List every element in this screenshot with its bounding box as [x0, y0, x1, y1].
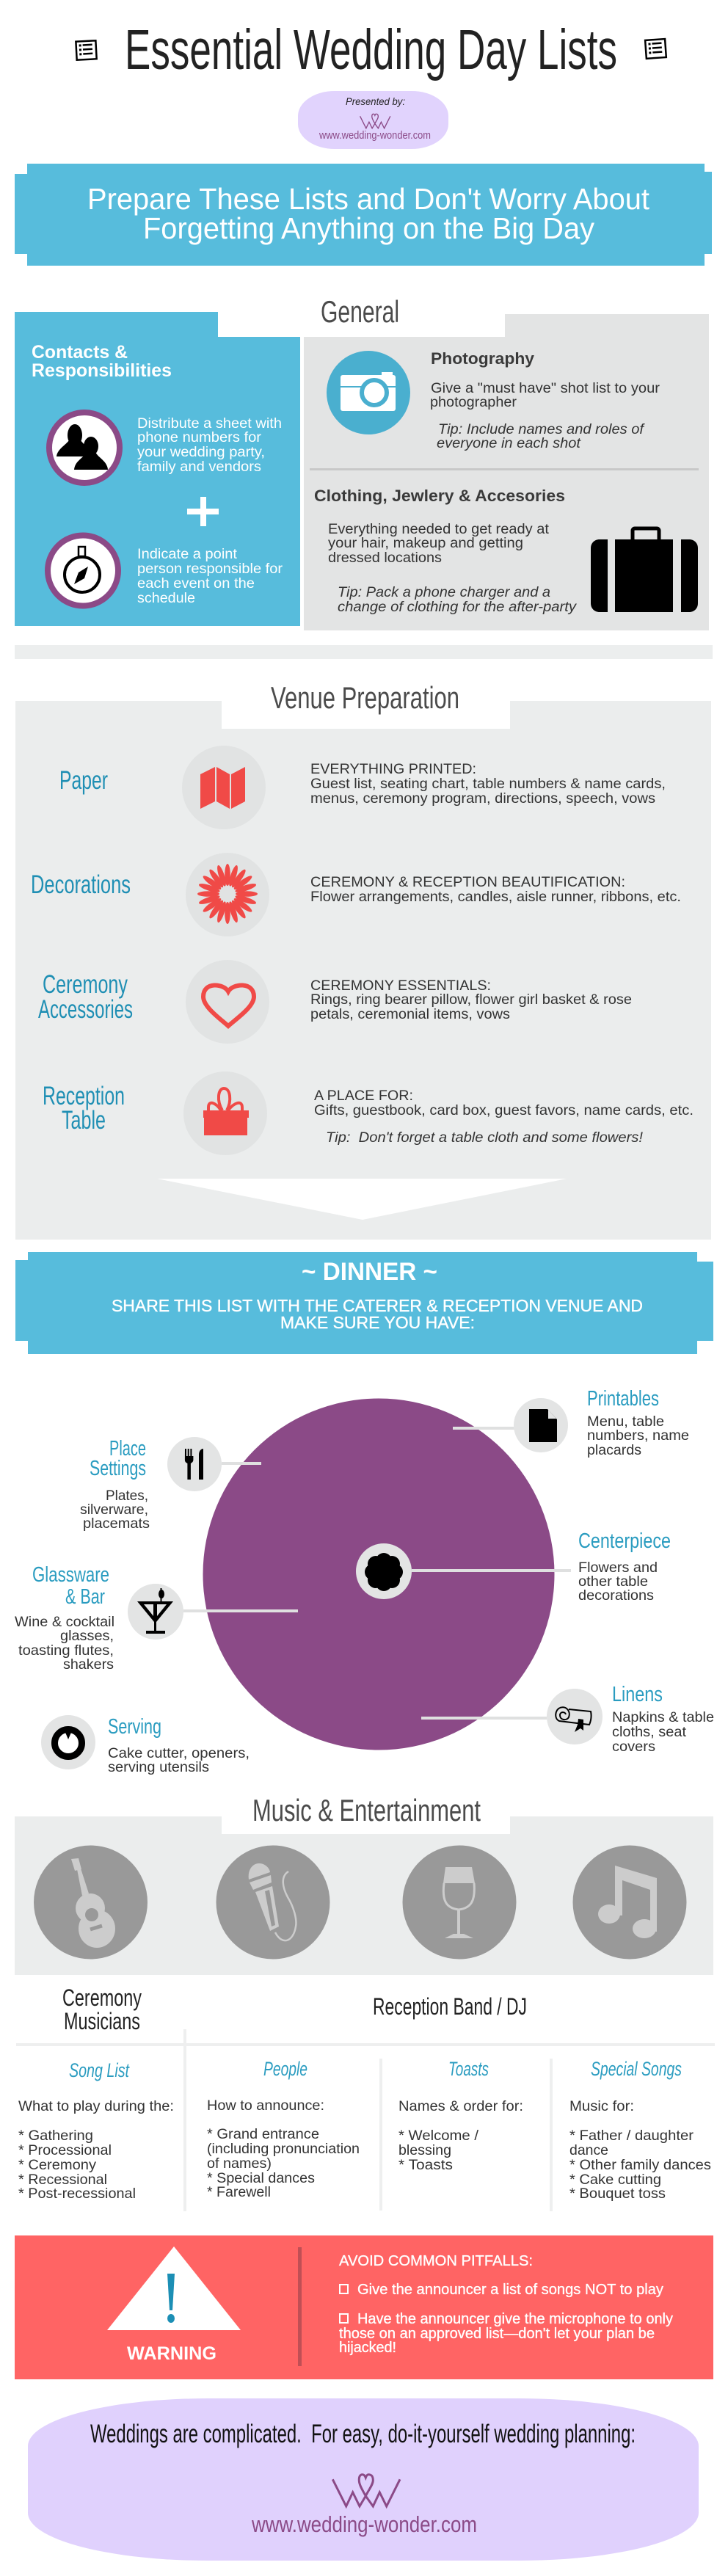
item: centerpiece text	[578, 1529, 671, 1604]
banner: intro: Forgetting Anything on the Big Day	[143, 211, 594, 245]
item: linens	[547, 1683, 714, 1755]
row: ceremony accessories: CEREMONY ESSENTIALS:	[310, 978, 491, 994]
item: place settings: Place	[109, 1437, 146, 1460]
column: people: * Grand entrance	[207, 2126, 319, 2142]
column: special songs: * Other family dances	[569, 2157, 711, 2173]
text: distribute: phone numbers for	[137, 429, 262, 445]
arrow: down	[157, 1179, 567, 1220]
item: linens: Napkins & table	[612, 1709, 714, 1725]
text: indicate: each event on the	[137, 575, 255, 592]
text: photography: Photography	[431, 349, 534, 368]
heading: reception band: Reception Band / DJ	[373, 1993, 527, 2020]
text: pitfalls	[339, 2253, 673, 2356]
text: pitfalls: Give the announcer a list of songs NOT to play	[357, 2282, 663, 2298]
column: people: * Farewell	[207, 2184, 271, 2200]
item: linens: covers	[612, 1739, 655, 1755]
item: glassware and bar: toasting flutes,	[18, 1642, 114, 1659]
text: clothing: change of clothing for the after-party	[338, 599, 577, 615]
icon: microphone	[216, 1845, 330, 1960]
text: photography: Tip: Include names and roles of	[438, 421, 646, 437]
panel: contacts and responsibilities: Contacts &	[32, 342, 128, 363]
panel: venue preparation	[15, 680, 711, 1240]
column: toasts: blessing	[398, 2142, 451, 2158]
text: distribute: your wedding party,	[137, 444, 265, 460]
text: pitfalls: hijacked!	[339, 2340, 396, 2356]
item: serving: Cake cutter, openers,	[108, 1745, 250, 1761]
banner: dinner: SHARE THIS LIST WITH THE CATERER & RECEPTION VENUE AND	[112, 1296, 643, 1315]
text: photography: everyone in each shot	[437, 435, 582, 451]
column: song list: Song List	[69, 2059, 130, 2081]
column: song list: * Gathering	[18, 2128, 93, 2144]
row: ceremony accessories	[38, 960, 632, 1044]
icon: plus	[187, 497, 219, 526]
row: reception table: A PLACE FOR:	[314, 1088, 413, 1104]
icon: guitar	[34, 1845, 148, 1960]
column: people: * Special dances	[207, 2170, 315, 2186]
column: special songs: * Cake cutting	[569, 2172, 661, 2188]
row: ceremony accessories: Ceremony	[43, 970, 128, 999]
row: paper: Guest list, seating chart, table numbers & name cards,	[310, 776, 666, 792]
item: place settings	[80, 1437, 222, 1532]
item: printables: placards	[587, 1442, 641, 1458]
item: glassware and bar: & Bar	[65, 1585, 105, 1609]
column: special songs: Special Songs	[591, 2058, 682, 2080]
column: special songs: Music for:	[569, 2098, 634, 2114]
column: song list: * Processional	[18, 2142, 112, 2158]
panel: music and entertainment	[15, 1793, 713, 1975]
column: toasts: * Welcome /	[398, 2128, 479, 2144]
icon: suitcase	[591, 528, 698, 612]
item: centerpiece text: Centerpiece	[578, 1529, 671, 1553]
panel: contacts and responsibilities	[15, 312, 300, 626]
item: glassware and bar: Wine & cocktail	[15, 1614, 114, 1630]
row: reception table: Gifts, guestbook, card box, guest favors, name cards, etc.	[314, 1102, 694, 1118]
text: clothing: Everything needed to get ready at	[328, 521, 550, 537]
row: ceremony accessories: petals, ceremonial items, vows	[310, 1006, 510, 1022]
row: ceremony accessories: Rings, ring bearer pillow, flower girl basket & rose	[310, 992, 632, 1008]
item: printables	[514, 1387, 689, 1458]
footer: call to action	[28, 2398, 699, 2561]
icon: compass	[48, 536, 118, 606]
chart: dinner table	[15, 1387, 714, 1775]
row: reception table: Table	[62, 1106, 106, 1135]
text: clothing: Tip: Pack a phone charger and a	[338, 584, 550, 600]
text: clothing: your hair, makeup and getting	[328, 535, 523, 551]
panel: contacts and responsibilities: Responsibilities	[32, 360, 172, 381]
item: place settings: Settings	[90, 1457, 146, 1480]
table grid lines	[16, 2029, 715, 2211]
column: people: (including pronunciation	[207, 2141, 360, 2157]
column: song list: * Ceremony	[18, 2157, 96, 2173]
item: printables: Printables	[587, 1387, 659, 1411]
icon: music note	[572, 1845, 687, 1960]
column: people	[207, 2058, 360, 2200]
row: reception table: Reception	[43, 1082, 125, 1110]
item: printables: numbers, name	[587, 1427, 689, 1444]
item: serving: Serving	[108, 1715, 161, 1739]
text: pitfalls: those on an approved list—don't let your plan be	[339, 2326, 655, 2342]
item: serving	[41, 1715, 250, 1775]
column: people: of names)	[207, 2155, 272, 2172]
text: pitfalls: Have the announcer give the microphone to only	[357, 2311, 673, 2327]
column: people: People	[263, 2058, 307, 2080]
row: reception table: Tip: Don't forget a table cloth and some flowers!	[326, 1129, 644, 1146]
row: paper: EVERYTHING PRINTED:	[310, 761, 476, 777]
column: song list: * Post-recessional	[18, 2186, 136, 2202]
divider strip	[15, 645, 713, 659]
text: distribute: Distribute a sheet with	[137, 415, 282, 432]
row: reception table	[43, 1071, 694, 1155]
headings: ceremony musicians: Ceremony	[62, 1984, 142, 2011]
banner: dinner: MAKE SURE YOU HAVE:	[280, 1313, 475, 1332]
text: indicate	[137, 546, 283, 606]
item: place settings: Plates,	[106, 1488, 148, 1504]
footer: call to action: www.wedding-wonder.com	[251, 2511, 477, 2537]
item: centerpiece text: other table	[578, 1573, 648, 1590]
column: toasts: Names & order for:	[398, 2098, 523, 2114]
text: photography: Give a "must have" shot list to your	[431, 380, 660, 396]
row: decorations: Decorations	[31, 870, 131, 899]
icon: people	[49, 412, 120, 483]
heading: music and entertainment: Music & Entertainment	[252, 1793, 481, 1827]
row: paper: Paper	[59, 766, 108, 795]
column: toasts	[398, 2058, 523, 2173]
icon: camera	[327, 351, 410, 434]
row: ceremony accessories: Accessories	[38, 995, 133, 1024]
text: pitfalls: AVOID COMMON PITFALLS:	[339, 2253, 533, 2269]
item: printables: Menu, table	[587, 1413, 664, 1430]
heading: general: General	[321, 294, 399, 329]
icon: wine glass	[402, 1845, 517, 1960]
banner: intro	[15, 164, 712, 266]
row: decorations: CEREMONY & RECEPTION BEAUTIFICATION:	[310, 874, 625, 890]
item: centerpiece text: Flowers and	[578, 1560, 658, 1576]
text: distribute: family and vendors	[137, 459, 261, 475]
text: photography: photographer	[430, 394, 517, 410]
column: song list: * Recessional	[18, 2172, 107, 2188]
headings: ceremony musicians: Musicians	[64, 2008, 140, 2034]
column: song list	[18, 2059, 174, 2202]
text: clothing: Clothing, Jewlery & Accesories	[314, 487, 565, 505]
item: linens: cloths, seat	[612, 1724, 687, 1740]
item: glassware and bar: Glassware	[32, 1563, 109, 1587]
column: special songs: * Bouquet toss	[569, 2186, 666, 2202]
icon: logo	[332, 2475, 400, 2506]
text: distribute	[137, 415, 282, 475]
heading: venue preparation: Venue Preparation	[271, 680, 459, 715]
column: special songs	[569, 2058, 711, 2202]
column: people: How to announce:	[207, 2097, 324, 2114]
row: decorations: Flower arrangements, candles, aisle runner, ribbons, etc.	[310, 889, 681, 905]
item: place settings: placemats	[83, 1516, 150, 1532]
column: special songs: dance	[569, 2142, 608, 2158]
column: toasts: * Toasts	[398, 2157, 453, 2173]
text: indicate: person responsible for	[137, 561, 283, 577]
panel: photography and clothing	[304, 314, 709, 630]
item: centerpiece text: decorations	[578, 1587, 654, 1604]
icon: list right	[645, 39, 666, 59]
item: place settings: silverware,	[80, 1502, 148, 1518]
row: paper: menus, ceremony program, directions, speech, vows	[310, 790, 655, 807]
badge: presented by: Presented by:	[346, 96, 405, 107]
item: glassware and bar	[15, 1563, 183, 1673]
banner: intro: Prepare These Lists and Don't Worry About	[87, 182, 650, 216]
badge: presented by	[298, 91, 448, 149]
headings: ceremony musicians	[62, 1984, 142, 2034]
text: indicate: Indicate a point	[137, 546, 238, 562]
label: warning: WARNING	[127, 2343, 216, 2364]
column: special songs: * Father / daughter	[569, 2128, 694, 2144]
icon: warning triangle	[107, 2246, 241, 2330]
row: paper	[59, 746, 666, 829]
badge: presented by: www.wedding-wonder.com	[318, 130, 431, 142]
column: song list: What to play during the:	[18, 2098, 174, 2114]
item: glassware and bar: glasses,	[60, 1628, 114, 1644]
banner: dinner	[15, 1252, 713, 1354]
item: glassware and bar: shakers	[63, 1656, 114, 1673]
text: photography	[430, 349, 660, 451]
text: indicate: schedule	[137, 590, 195, 606]
icon: list left	[76, 40, 97, 60]
text: clothing: dressed locations	[328, 550, 442, 566]
item: linens: Linens	[612, 1683, 663, 1706]
panel: warning	[15, 2235, 713, 2379]
icon: centerpiece	[356, 1543, 412, 1599]
column: toasts: Toasts	[448, 2058, 489, 2080]
text: clothing	[314, 487, 577, 615]
row: decorations	[31, 853, 681, 936]
item: serving: serving utensils	[108, 1759, 209, 1775]
banner: dinner: ~ DINNER ~	[302, 1258, 437, 1286]
